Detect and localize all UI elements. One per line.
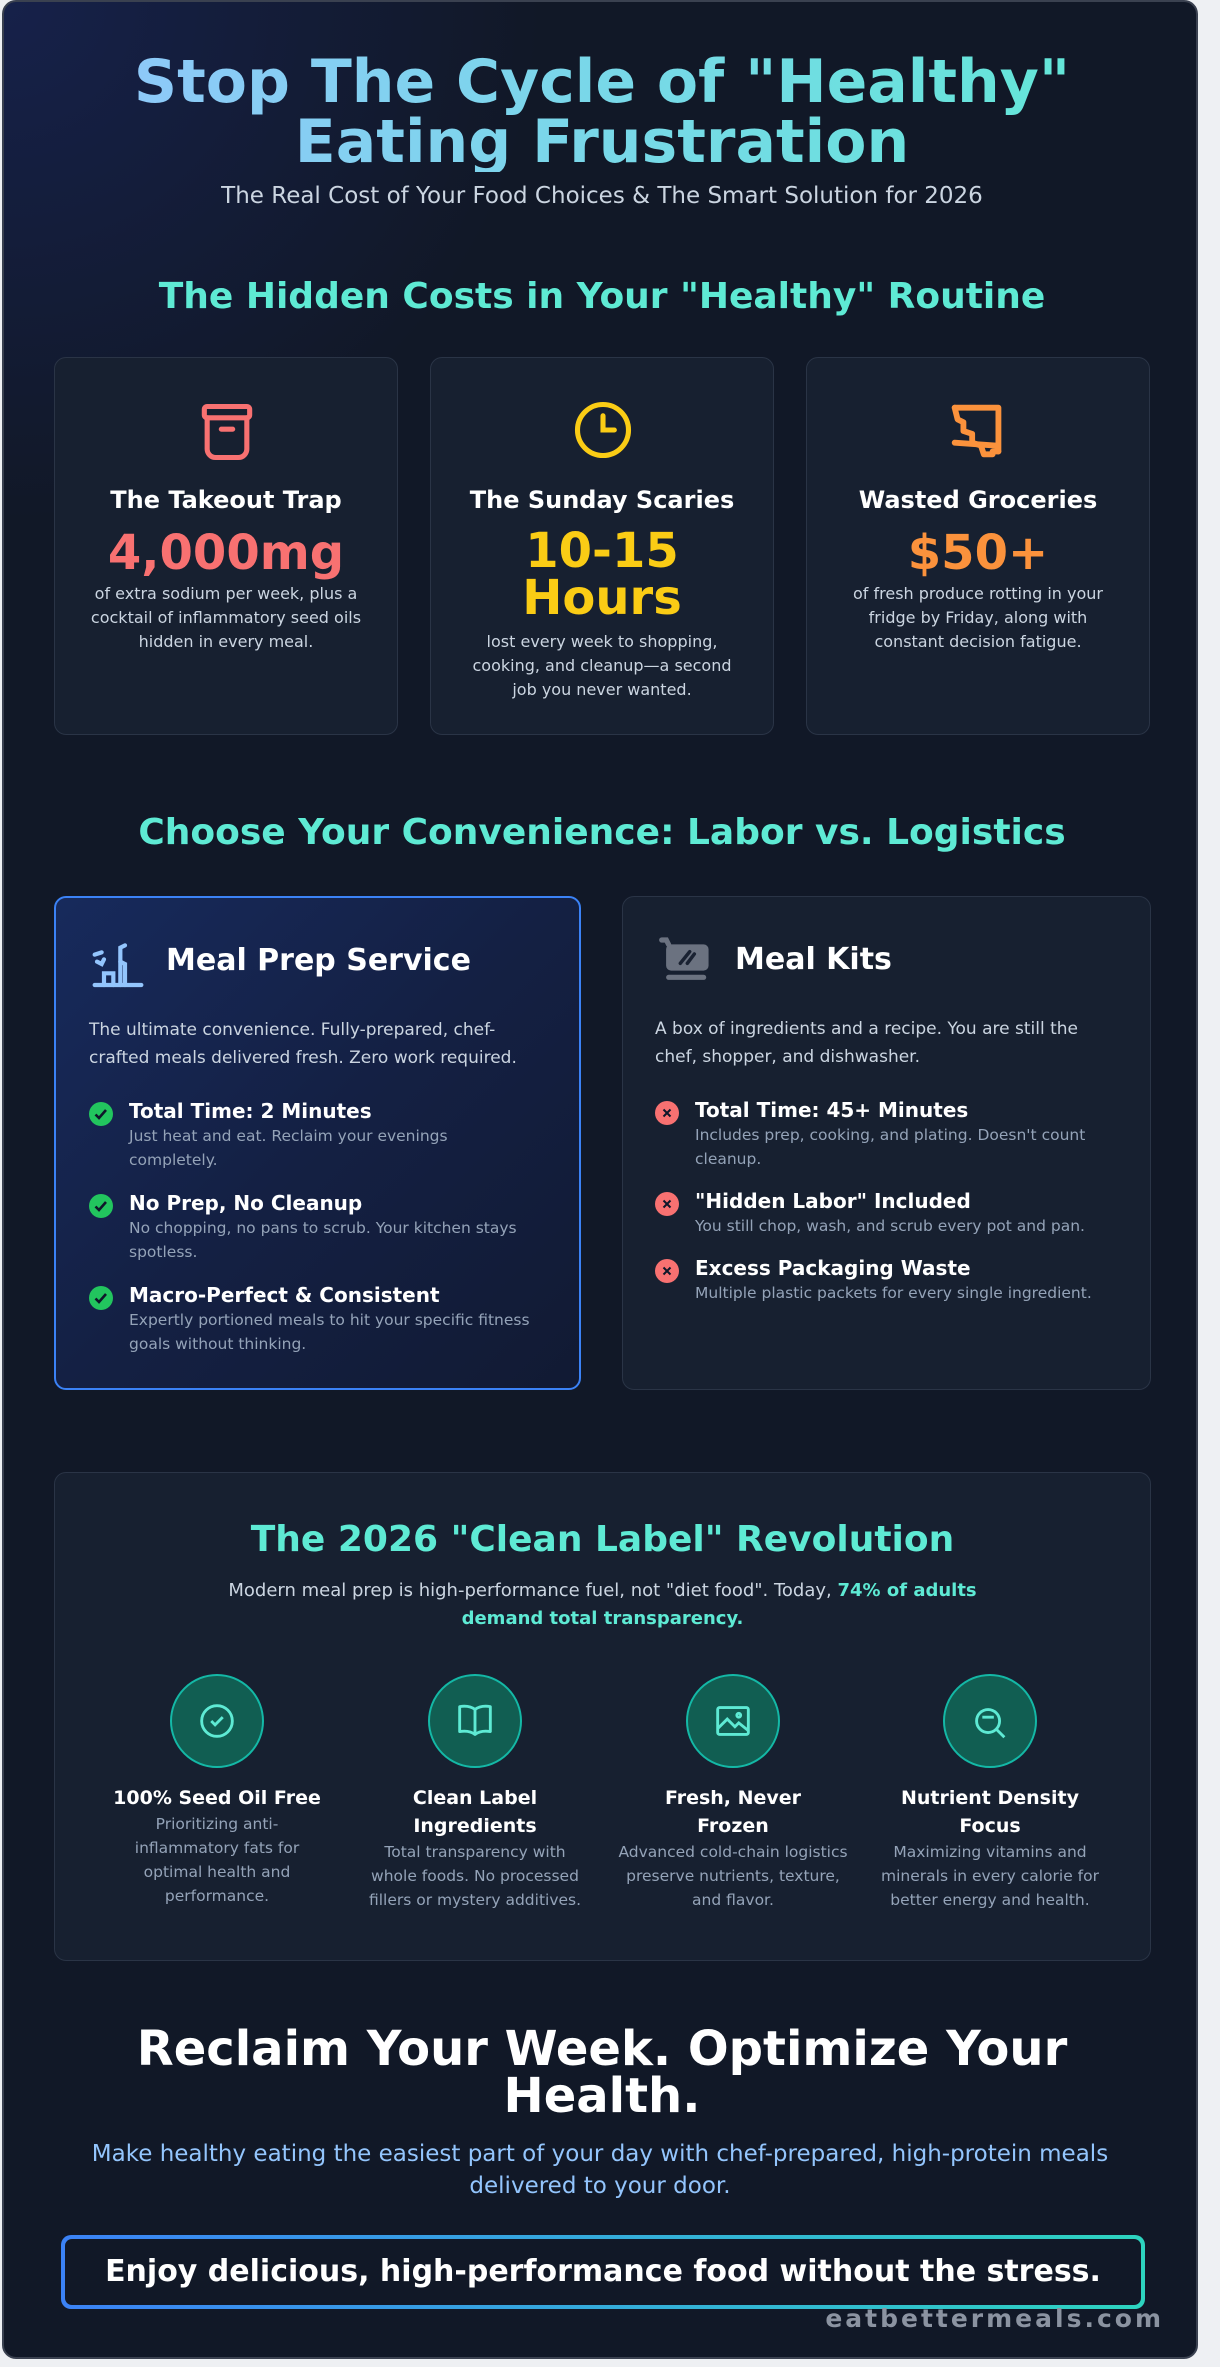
feature: seed oil free: 100% Seed Oil Free [113,1787,321,1809]
description: of extra sodium per week, plus a cocktail of inflammatory seed oils hidden in every meal. [91,584,361,651]
icon: fridge [952,404,1002,458]
panel title: Meal Prep Service [166,943,471,978]
description: of fresh produce rotting in your fridge by Friday, along with constant decision fatigue. [853,584,1103,651]
feature: nutrient density: Nutrient Density [901,1787,1079,1809]
item: hidden labor: "Hidden Labor" Included [695,1189,971,1213]
icon: takeout box [202,404,252,460]
icon: clock [574,402,632,458]
card: wasted groceries [806,357,1150,735]
title: Stop The Cycle of "Healthy" [134,47,1070,117]
item: total time: Total Time: 45+ Minutes [695,1098,968,1122]
item: hidden labor [655,1189,1085,1235]
feature: nutrient density: Maximizing vitamins and minerals in every calorie for better energy and health. [881,1843,1099,1909]
CTA button [61,2235,1145,2309]
item: macro-perfect: Macro-Perfect & Consistent [129,1283,440,1307]
item: packaging: Multiple plastic packets for every single ingredient. [695,1284,1092,1302]
stat: $50+ [908,525,1048,581]
feature: clean label ingredients [369,1674,581,1909]
card title: The Takeout Trap [110,486,342,514]
title [4,52,1200,172]
feature: fresh never frozen [618,1674,848,1909]
panel heading: The 2026 "Clean Label" Revolution [251,1519,954,1560]
description: lost every week to shopping, cooking, and cleanup—a second job you never wanted. [472,632,732,699]
item: total time [655,1098,1085,1168]
item: packaging [655,1256,1092,1302]
panel: meal kits [622,896,1151,1390]
feature: fresh never frozen: Fresh, Never [665,1787,801,1809]
CTA subtext: Make healthy eating the easiest part of your day with chef-prepared, high-protein meals delivered to your door. [92,2141,1108,2199]
card: takeout trap [54,357,398,735]
heading: choose convenience: Choose Your Convenience: Labor vs. Logistics [138,812,1066,853]
features row [113,1674,1099,1909]
panel title: Meal Kits [735,942,892,977]
title: Eating Frustration [295,107,909,177]
feature: clean label ingredients: Clean Label [413,1787,537,1809]
icon: meal kit [659,937,709,980]
item: total time: Just heat and eat. Reclaim your evenings completely. [129,1127,448,1169]
item: macro-perfect [89,1283,530,1353]
item: no prep: No Prep, No Cleanup [129,1191,362,1215]
item: no prep: No chopping, no pans to scrub. Your kitchen stays spotless. [129,1219,517,1261]
item: total time: Total Time: 2 Minutes [129,1099,372,1123]
CTA heading: Health. [504,2068,700,2124]
panel: meal prep service [54,896,581,1390]
subtitle: The Real Cost of Your Food Choices & The Smart Solution for 2026 [221,183,983,209]
item: packaging: Excess Packaging Waste [695,1256,971,1280]
feature: nutrient density: Focus [959,1815,1021,1837]
card: sunday scaries [430,357,774,735]
watermark: eatbettermeals.com [825,2304,1164,2333]
feature: fresh never frozen: Frozen [697,1815,769,1837]
CTA heading [137,2021,1068,2124]
panel: clean label revolution [54,1472,1151,1961]
intro text [228,1580,977,1629]
item: total time: Includes prep, cooking, and plating. Doesn't count cleanup. [695,1126,1085,1168]
icon: meal prep [92,943,144,988]
feature: fresh never frozen: Advanced cold-chain logistics preserve nutrients, texture, and flavor. [618,1843,848,1909]
panel description: A box of ingredients and a recipe. You are still the chef, shopper, and dishwasher. [655,1019,1078,1067]
stat [522,523,682,626]
feature: clean label ingredients: Ingredients [413,1815,537,1837]
item: macro-perfect: Expertly portioned meals to hit your specific fitness goals without thinking. [129,1311,530,1353]
intro text: demand total transparency. [462,1608,743,1629]
intro text: Modern meal prep is high-performance fuel, not "diet food". Today, 74% of adults [228,1580,977,1601]
item: no prep [89,1191,517,1261]
item: hidden labor: You still chop, wash, and scrub every pot and pan. [695,1217,1085,1235]
heading: hidden costs: The Hidden Costs in Your "Healthy" Routine [159,276,1045,317]
item: total time [89,1099,448,1169]
feature: clean label ingredients: Total transparency with whole foods. No processed fillers or mystery additives. [369,1843,581,1909]
panel description: The ultimate convenience. Fully-prepared, chef-crafted meals delivered fresh. Zero work required. [89,1020,517,1068]
CTA heading: Reclaim Your Week. Optimize Your [137,2021,1067,2077]
CTA button: Enjoy delicious, high-performance food without the stress. [105,2254,1101,2289]
stat: Hours [522,570,682,626]
feature: seed oil free [113,1674,321,1905]
feature: seed oil free: Prioritizing anti-inflammatory fats for optimal health and performance. [135,1815,299,1905]
stat: 10-15 [525,523,679,579]
card title: Wasted Groceries [859,486,1097,514]
stat: 4,000mg [108,525,344,581]
feature: nutrient density [881,1674,1099,1909]
card title: The Sunday Scaries [470,486,734,514]
